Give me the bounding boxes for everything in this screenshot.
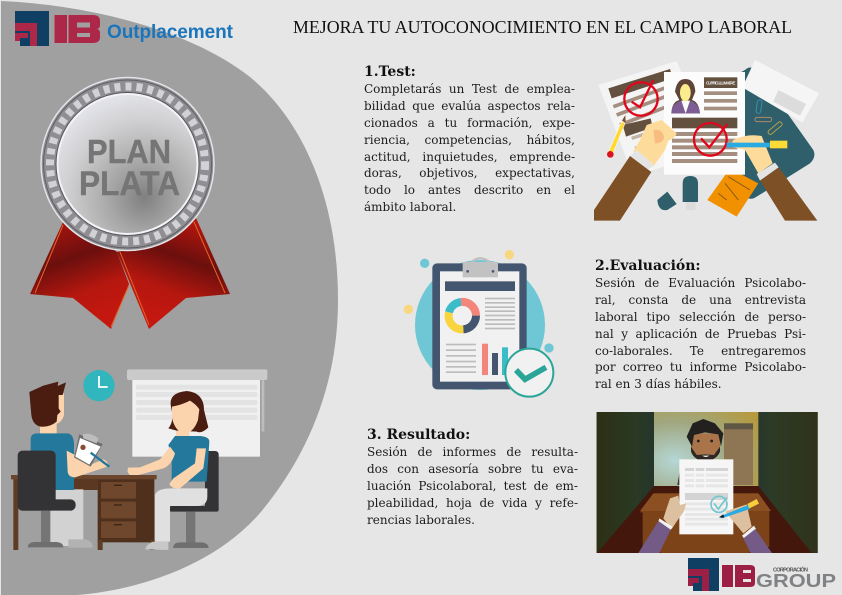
text block: 1. Test: todo lo antes descrito en el bbox=[364, 183, 575, 197]
text block: 2. Evaluación: laboral tipo selección de perso- bbox=[595, 310, 806, 324]
CV sheet: CURRICULUM VITAE bbox=[706, 80, 735, 85]
text block: 2. Evaluación: ral en 3 días hábiles. bbox=[595, 377, 722, 391]
ribbon left bbox=[30, 222, 129, 329]
text block: 3. Resultado bbox=[367, 427, 578, 527]
text block: 2. Evaluación: Sesión de Evaluación Psicolabo- bbox=[595, 276, 806, 290]
man bbox=[18, 382, 109, 548]
medal: Plan Plata bbox=[30, 78, 230, 329]
illustration: CV review with hands bbox=[594, 60, 819, 221]
text block: 2. Evaluación: ral, consta de una entrevista bbox=[595, 293, 806, 307]
document bbox=[679, 459, 733, 534]
text block: 2. Evaluación bbox=[595, 258, 806, 391]
bar chart bbox=[482, 344, 508, 375]
text block: 1. Test bbox=[364, 64, 575, 214]
folder bbox=[720, 67, 814, 199]
paperclips bbox=[755, 100, 783, 135]
silver ring bbox=[41, 78, 214, 250]
title: MEJORA TU AUTOCONOCIMIENTO EN EL CAMPO LABORAL bbox=[293, 17, 792, 37]
text block: 1. Test: Completarás un Test de emplea- bbox=[364, 82, 575, 96]
illustration: interview at desk bbox=[11, 369, 267, 550]
text block: 3. Resultado: luación Psicolaboral, test de em- bbox=[367, 479, 578, 493]
teal circle and dots bbox=[404, 250, 554, 390]
text block: 1. Test: bilidad que evalúa aspectos rela- bbox=[364, 99, 575, 113]
logo: IB Group bbox=[688, 558, 836, 591]
clock bbox=[83, 370, 115, 401]
illustration: clipboard report bbox=[404, 250, 554, 397]
text block: 1. Test: cionados a tu formación, expe- bbox=[364, 116, 575, 130]
logo: IB Outplacement: Outplacement bbox=[107, 22, 234, 43]
envelope bbox=[742, 60, 819, 123]
text block: 3. Resultado: pleabilidad, hoja de vida y refe- bbox=[367, 496, 578, 510]
text block: 2. Evaluación: nal y aplicación de Pruebas Psi- bbox=[595, 327, 806, 341]
text block: 3. Resultado: 3. Resultado: bbox=[367, 427, 470, 443]
donut chart bbox=[449, 302, 476, 329]
text block: 2. Evaluación: co-laborales. Te entregaremos bbox=[595, 344, 806, 358]
check badge bbox=[505, 349, 553, 397]
clipboard board bbox=[432, 258, 527, 389]
hands and pen bbox=[638, 496, 772, 553]
room bbox=[597, 412, 818, 553]
text block: 1. Test: doras, objetivos, expectativas, bbox=[364, 166, 575, 180]
logo: IB Group: CORPORACIÓN bbox=[773, 566, 808, 574]
text block: 1. Test: actitud, inquietudes, emprende- bbox=[364, 150, 575, 164]
CV sheet bbox=[664, 72, 745, 175]
clipboard bbox=[74, 434, 109, 467]
door bbox=[724, 423, 753, 485]
illustration: man with signed document bbox=[597, 412, 818, 553]
text block: 1. Test: 1.Test: bbox=[364, 64, 416, 80]
medal: Plan Plata: PLATA bbox=[79, 165, 180, 203]
text block: 2. Evaluación: por correo tu informe Psicolabo- bbox=[595, 360, 806, 374]
table bbox=[640, 493, 771, 553]
text block: 3. Resultado: rencias laborales. bbox=[367, 513, 475, 527]
text lines bbox=[446, 298, 515, 373]
window blind bbox=[127, 369, 267, 457]
woman bbox=[127, 391, 219, 550]
pencil bbox=[607, 115, 626, 158]
text block: 1. Test: riencia, competencias, hábitos, bbox=[364, 133, 575, 147]
text block: 1. Test: ámbito laboral. bbox=[364, 200, 456, 214]
orange note bbox=[707, 168, 758, 217]
gray circular background panel bbox=[1, 1, 338, 595]
red circle on back sheet bbox=[624, 80, 658, 116]
text block: 3. Resultado: Sesión de informes de resulta- bbox=[367, 445, 578, 459]
USB drive bbox=[657, 176, 698, 210]
medal face bbox=[58, 94, 198, 234]
hands and sleeves bbox=[594, 120, 817, 221]
man bbox=[677, 419, 732, 485]
text block: 3. Resultado: dos con asesoría sobre tu eva- bbox=[367, 462, 578, 476]
text block: 2. Evaluación: 2.Evaluación: bbox=[595, 258, 701, 274]
back sheet bbox=[598, 61, 713, 177]
logo: IB Outplacement bbox=[15, 11, 234, 46]
logo: IB Group: GROUP bbox=[756, 571, 836, 591]
medal: Plan Plata: PLAN bbox=[87, 133, 171, 170]
ribbon right bbox=[117, 218, 230, 329]
desk bbox=[11, 475, 157, 550]
